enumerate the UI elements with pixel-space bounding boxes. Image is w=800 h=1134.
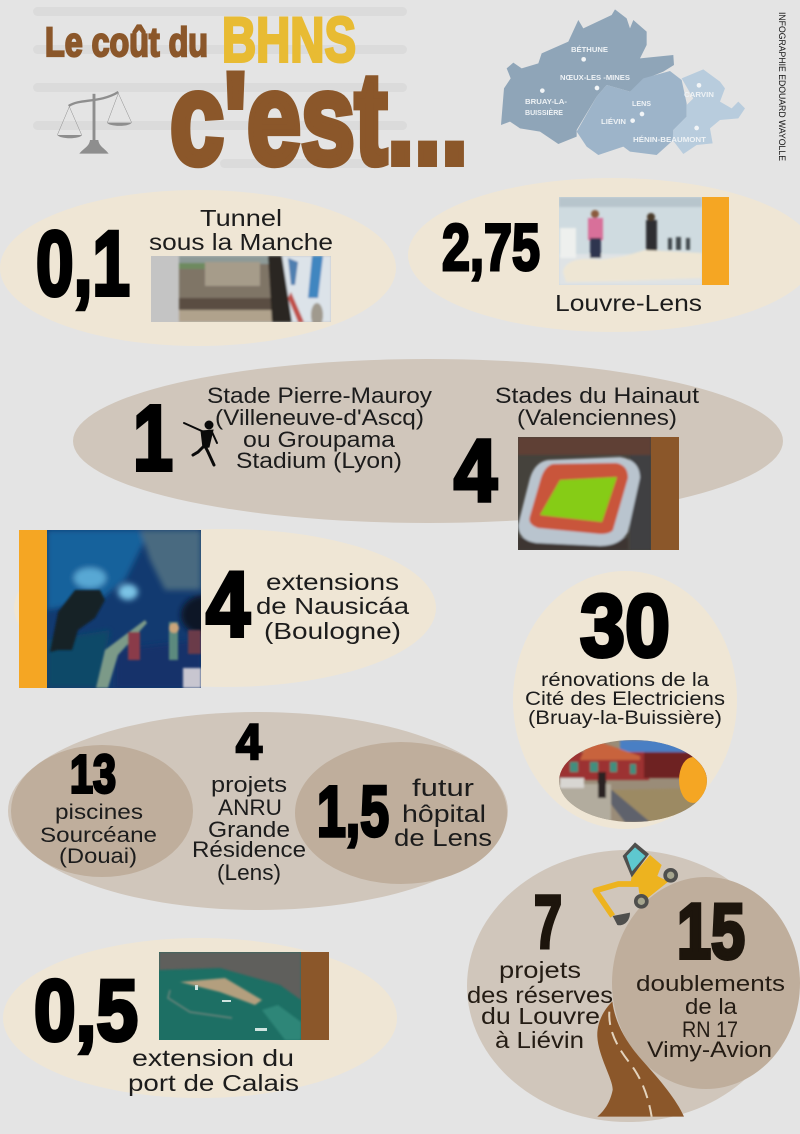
photo: tunnel bbox=[151, 256, 331, 322]
label bbox=[394, 775, 492, 852]
label bbox=[40, 801, 157, 868]
label: Résidence bbox=[192, 837, 306, 862]
label bbox=[495, 383, 699, 430]
photo: port bbox=[159, 952, 301, 1040]
accent bar bbox=[19, 530, 47, 688]
label: doublements bbox=[636, 971, 785, 996]
number: 1,5 bbox=[317, 773, 389, 852]
map: HÉNIN-BEAUMONT bbox=[633, 135, 707, 144]
number: 4 bbox=[454, 421, 497, 520]
panel: réserves du Louvre et RN 17 bbox=[467, 842, 800, 1122]
title line: Le coût du: Le coût du bbox=[45, 19, 208, 65]
label: hôpital bbox=[402, 801, 486, 828]
label: piscines bbox=[55, 801, 143, 824]
orange overlay bbox=[679, 757, 707, 803]
label: extensions bbox=[266, 569, 399, 595]
label: (Valenciennes) bbox=[517, 405, 677, 430]
number: 0,5 bbox=[34, 963, 138, 1059]
number: 7 bbox=[534, 880, 562, 964]
number: 2,75 bbox=[442, 210, 540, 284]
label: port de Calais bbox=[128, 1070, 299, 1096]
number: 13 bbox=[70, 746, 116, 804]
number: 15 bbox=[677, 887, 745, 975]
label: des réserves bbox=[467, 982, 613, 1008]
title line: BHNS: BHNS bbox=[222, 6, 356, 76]
map bbox=[501, 9, 745, 155]
icon: player bbox=[184, 421, 217, 465]
panel: stades bbox=[73, 359, 783, 550]
sub-panel: piscines bbox=[11, 745, 193, 877]
label bbox=[467, 957, 613, 1053]
label bbox=[192, 772, 306, 885]
label: de la bbox=[685, 994, 738, 1019]
map: LENS bbox=[632, 101, 651, 108]
number: 1 bbox=[133, 386, 173, 490]
icon: road bbox=[597, 1002, 684, 1117]
label bbox=[636, 971, 785, 1062]
map: BUISSIÈRE bbox=[525, 108, 563, 117]
map: CARVIN bbox=[684, 92, 714, 99]
panel: Cité des Electriciens bbox=[513, 571, 737, 829]
title bbox=[45, 6, 468, 192]
number: 4 bbox=[236, 714, 262, 770]
panel: tunnel sous la Manche bbox=[0, 190, 396, 346]
label: RN 17 bbox=[682, 1017, 738, 1042]
panel: ANRU group bbox=[8, 712, 508, 910]
number: 30 bbox=[580, 576, 670, 675]
photo: Louvre-Lens bbox=[559, 197, 702, 285]
number: 4 bbox=[206, 554, 250, 656]
label: (Bruay-la-Buissière) bbox=[528, 707, 722, 729]
panel: Nausicaa bbox=[14, 529, 436, 688]
label bbox=[207, 383, 432, 473]
label: Grande bbox=[208, 817, 290, 842]
map: LIÉVIN bbox=[601, 117, 626, 126]
sub-panel: RN 17 bbox=[612, 877, 800, 1089]
accent bar bbox=[702, 197, 729, 285]
map: BÉTHUNE bbox=[571, 45, 608, 54]
label bbox=[256, 569, 409, 644]
label: Cité des Electriciens bbox=[525, 688, 725, 710]
label: de Nausicáa bbox=[256, 593, 409, 619]
label: (Douai) bbox=[59, 845, 137, 868]
label: Stadium (Lyon) bbox=[236, 448, 402, 473]
label: Tunnel bbox=[200, 205, 282, 231]
panel: port de Calais bbox=[3, 938, 397, 1098]
label: Stade Pierre-Mauroy bbox=[207, 383, 432, 408]
label bbox=[525, 669, 725, 729]
label bbox=[149, 205, 333, 255]
label: sous la Manche bbox=[149, 229, 333, 255]
label: Louvre-Lens bbox=[555, 290, 702, 316]
map: BRUAY-LA- bbox=[525, 99, 568, 106]
label: Vimy-Avion bbox=[647, 1037, 772, 1062]
icon: excavator bbox=[595, 842, 678, 925]
sub-panel: hôpital bbox=[295, 742, 507, 884]
panel: Louvre-Lens bbox=[408, 178, 800, 332]
label: ou Groupama bbox=[243, 427, 396, 452]
label: Sourcéane bbox=[40, 824, 157, 847]
label: Stades du Hainaut bbox=[495, 383, 699, 408]
label: futur bbox=[412, 775, 474, 802]
icon: scales bbox=[57, 92, 132, 154]
label: ANRU bbox=[218, 795, 282, 820]
label: du Louvre bbox=[481, 1003, 600, 1029]
label bbox=[128, 1045, 299, 1096]
number: 0,1 bbox=[36, 213, 130, 315]
photo: aquarium bbox=[47, 530, 201, 688]
credit: INFOGRAPHIE EDOUARD WAYOLLE bbox=[776, 12, 787, 161]
photo: cité bbox=[559, 740, 707, 822]
accent bar bbox=[651, 437, 679, 550]
label: (Lens) bbox=[217, 860, 281, 885]
label: extension du bbox=[132, 1045, 294, 1071]
label: projets bbox=[499, 957, 581, 983]
title line: c'est...: c'est... bbox=[170, 46, 468, 192]
label: à Liévin bbox=[495, 1027, 584, 1053]
label: de Lens bbox=[394, 825, 492, 852]
label: rénovations de la bbox=[541, 669, 709, 691]
photo: stadium bbox=[518, 437, 651, 550]
accent bar bbox=[301, 952, 329, 1040]
label: (Villeneuve-d'Ascq) bbox=[215, 405, 424, 430]
map: NŒUX-LES -MINES bbox=[560, 75, 630, 82]
label: (Boulogne) bbox=[264, 618, 401, 644]
label: projets bbox=[211, 772, 287, 797]
